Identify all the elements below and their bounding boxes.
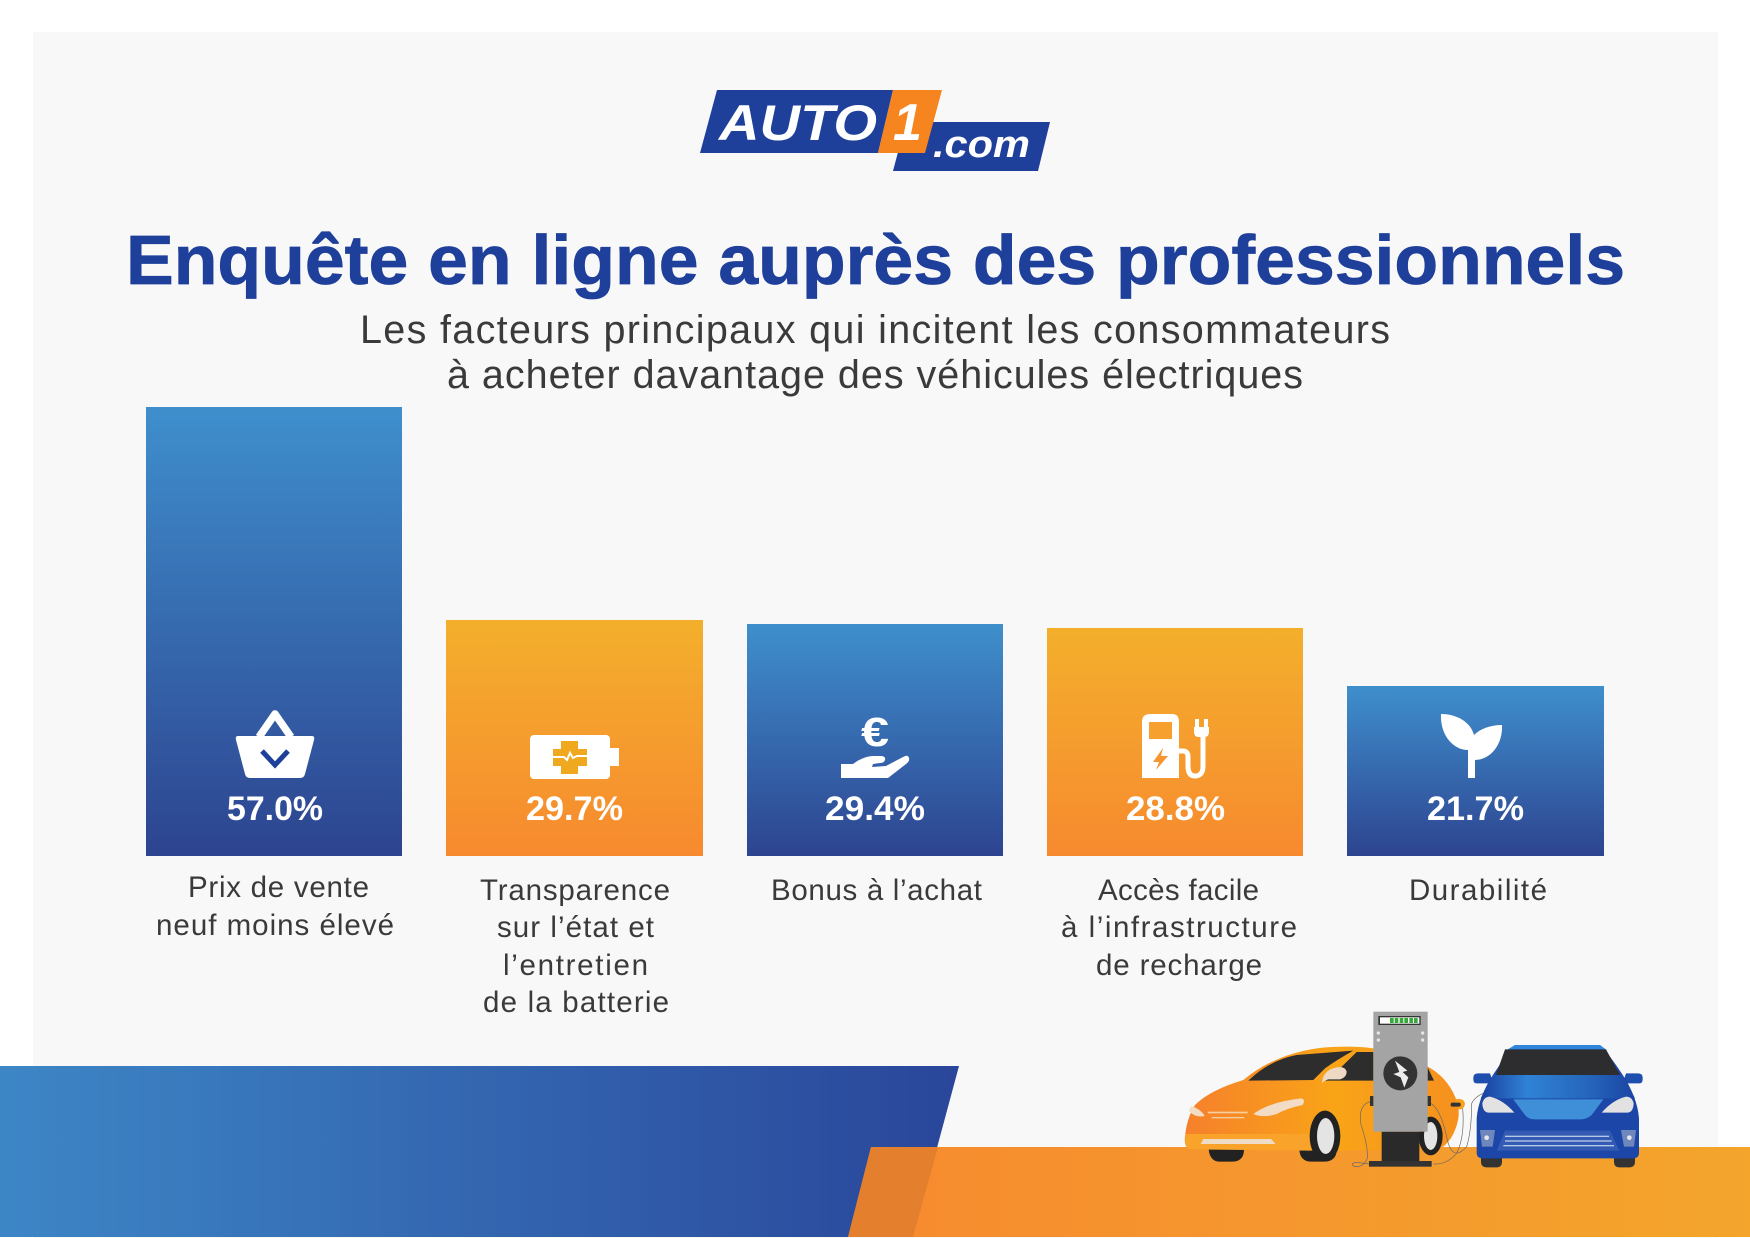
bar: transparence batterie 29.7%: 29.7%: [526, 790, 623, 828]
bar: durabilite 21.7%: [1347, 686, 1604, 856]
bar: bonus 29.4%: [747, 624, 1003, 856]
subtitle: à acheter davantage des véhicules électriques: [447, 353, 1303, 397]
icon: battery with health cross: [530, 735, 619, 779]
label: transparence: de la batterie: [483, 986, 669, 1019]
footer band: orange: [848, 1147, 1750, 1237]
blue car: [1473, 1045, 1643, 1167]
label: prix de vente: [156, 871, 394, 942]
label: acces facile: [1061, 874, 1297, 982]
logo: AUTO1.com: [700, 90, 1050, 171]
label: transparence: l’entretien: [503, 949, 648, 982]
label: acces facile: de recharge: [1096, 949, 1262, 982]
label: transparence: sur l’état et: [497, 911, 654, 944]
bar: transparence batterie 29.7%: [446, 620, 703, 856]
label: acces facile: Accès facile: [1098, 874, 1259, 907]
subtitle: [360, 308, 1390, 397]
logo: AUTO1.com: .com: [933, 124, 1030, 166]
bar: prix de vente 57.0%: 57.0%: [227, 790, 323, 828]
icon: basket: [236, 714, 314, 778]
label: transparence: [480, 874, 670, 1019]
bar: bonus 29.4%: 29.4%: [825, 790, 925, 828]
label: prix de vente: Prix de vente: [188, 871, 369, 904]
bar: infrastructure 28.8%: 28.8%: [1126, 790, 1225, 828]
icon: euro over hand: €: [861, 709, 889, 755]
cables: [1352, 1093, 1483, 1166]
subtitle: Les facteurs principaux qui incitent les consommateurs: [360, 308, 1390, 352]
label: transparence: Transparence: [480, 874, 670, 907]
bar: prix de vente 57.0%: [146, 407, 402, 856]
logo: AUTO1.com: AUTO: [717, 95, 877, 151]
label: bonus: Bonus à l’achat: [771, 874, 982, 907]
charging station: [1369, 1012, 1432, 1167]
footer band: blue: [0, 1066, 959, 1237]
orange car: [1185, 1047, 1465, 1162]
bar: durabilite 21.7%: 21.7%: [1427, 790, 1524, 828]
title: Enquête en ligne auprès des professionnels: [126, 221, 1625, 299]
icon: charging pump and plug: [1142, 714, 1209, 778]
icon: euro over hand: [841, 709, 909, 778]
illustration: cars and charging station: [1185, 1012, 1643, 1167]
label: prix de vente: neuf moins élevé: [156, 909, 394, 942]
logo: AUTO1.com: 1: [893, 94, 922, 152]
bar: infrastructure 28.8%: [1047, 628, 1303, 856]
label: acces facile: à l’infrastructure: [1061, 911, 1297, 944]
icon: sprout: [1441, 714, 1502, 778]
label: durabilite: Durabilité: [1409, 874, 1547, 907]
